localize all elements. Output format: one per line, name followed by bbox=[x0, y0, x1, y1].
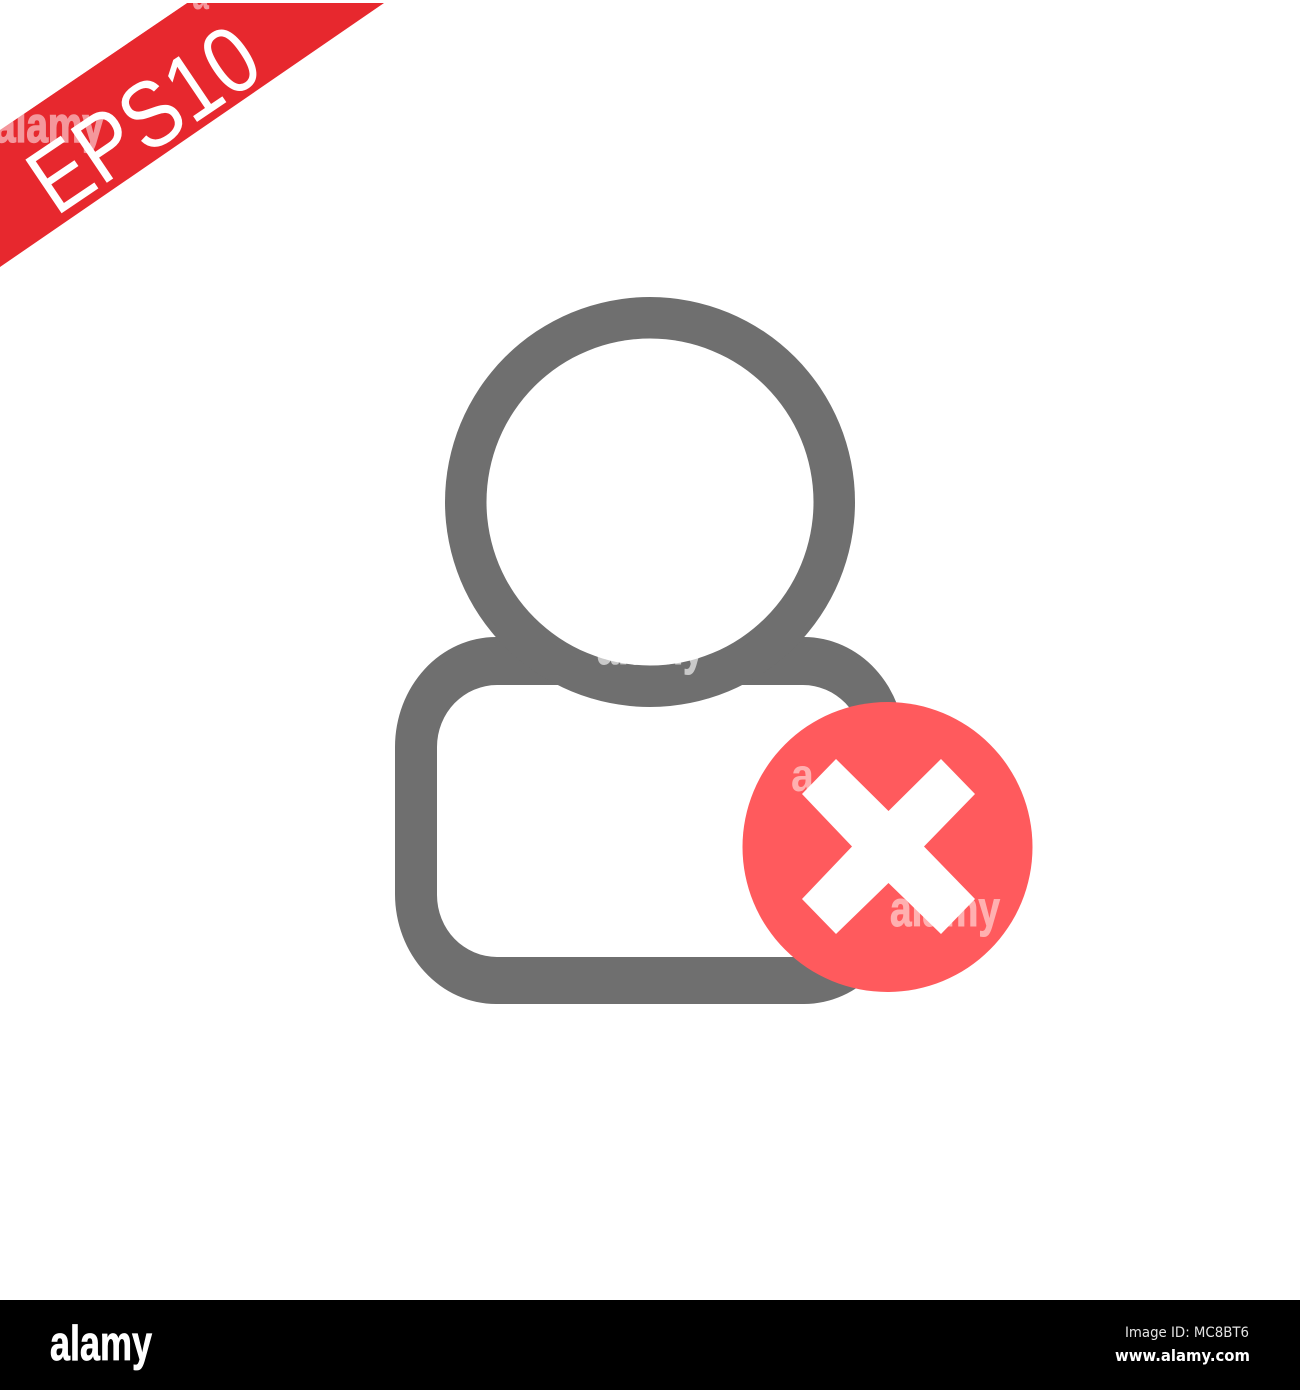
footer website: www.alamy.com bbox=[1115, 1346, 1250, 1365]
ring watermark: alamy bbox=[597, 619, 704, 675]
ribbon mask above the top edge bbox=[0, 0, 384, 130]
footer logo: alamy: alamy bbox=[50, 1317, 152, 1371]
icon: red badge circle bbox=[742, 702, 1032, 992]
badge watermark: alamy bbox=[890, 881, 1000, 937]
footer bar bbox=[0, 1300, 1300, 1390]
icon: user with remove badge bbox=[395, 297, 1032, 1004]
badge watermark letter: a bbox=[791, 749, 814, 801]
icon: user head interior bbox=[486, 338, 814, 666]
icon: user head ring bbox=[445, 297, 855, 707]
corner ribbon: EPS10 bbox=[0, 0, 384, 267]
icon: user body outline bbox=[395, 637, 905, 1004]
icon: white cross bbox=[802, 759, 975, 934]
footer image id: Image ID: MC8BT6 bbox=[1125, 1325, 1249, 1341]
